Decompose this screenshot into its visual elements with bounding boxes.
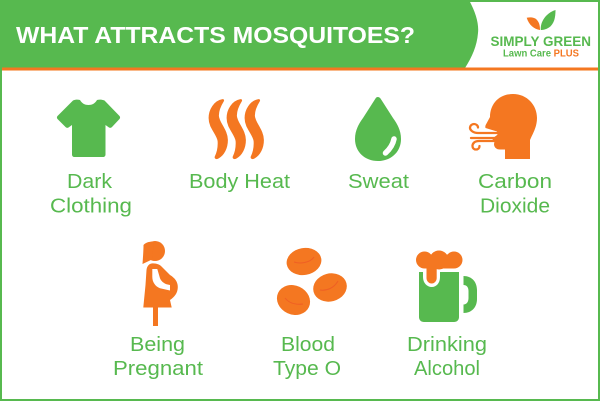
- icon: drop: [355, 97, 401, 161]
- label: Carbon: [478, 171, 552, 193]
- item: dark clothing: [50, 100, 132, 218]
- header band: [0, 0, 598, 71]
- item: being pregnant: [113, 241, 203, 380]
- label: Blood: [281, 334, 335, 356]
- label: Type O: [273, 358, 341, 380]
- label: Dark: [67, 171, 113, 193]
- logo tagline: Lawn Care PLUS: [503, 48, 579, 60]
- logo: [490, 10, 591, 60]
- icon: beer mug: [416, 250, 477, 322]
- label: Clothing: [50, 196, 132, 218]
- label: [407, 334, 487, 380]
- label: [113, 334, 203, 380]
- icon: t-shirt: [57, 100, 120, 157]
- label: Being: [130, 334, 185, 356]
- icon: head exhaling: [470, 94, 537, 159]
- label: [50, 171, 132, 218]
- label: [273, 334, 341, 380]
- title: WHAT ATTRACTS MOSQUITOES?: [16, 22, 415, 48]
- label: Drinking: [407, 334, 487, 356]
- logo name: SIMPLY GREEN: [490, 33, 591, 49]
- item: drinking alcohol: [407, 250, 487, 380]
- icon: pregnant figure: [142, 241, 178, 326]
- item: body heat: [189, 100, 290, 193]
- label: Alcohol: [414, 358, 480, 380]
- label: [478, 171, 552, 218]
- label: Sweat: [348, 171, 409, 193]
- label: Pregnant: [113, 358, 203, 380]
- label: Body Heat: [189, 171, 290, 193]
- icon: heat waves: [209, 100, 264, 159]
- icon: leaves: [527, 10, 556, 30]
- item: sweat: [348, 97, 409, 193]
- label: Dioxide: [480, 196, 550, 218]
- item: carbon dioxide: [470, 94, 552, 218]
- item: blood type o: [272, 245, 350, 380]
- icon: red blood cells: [272, 245, 350, 320]
